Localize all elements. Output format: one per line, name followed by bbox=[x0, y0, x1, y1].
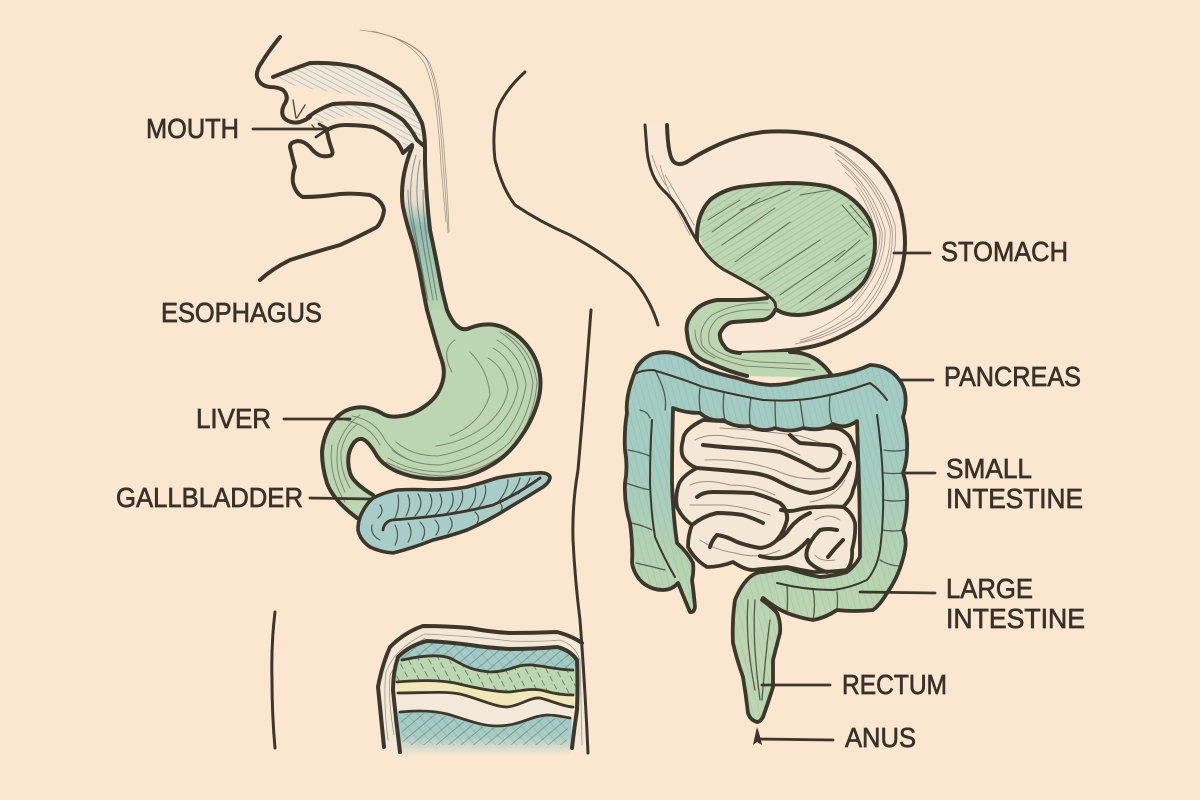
label: anus: ANUS bbox=[845, 722, 916, 753]
esophagus left wall bbox=[402, 147, 427, 310]
left stomach bbox=[322, 310, 540, 518]
lip tuft bbox=[293, 100, 316, 130]
outer arch bbox=[378, 626, 582, 747]
label: small intestine: SMALL bbox=[946, 453, 1032, 484]
cream layer bbox=[396, 692, 575, 726]
nose and upper lip outline bbox=[257, 37, 310, 123]
band lines bbox=[397, 656, 573, 726]
lumen hatching bbox=[697, 183, 875, 315]
lower lip and jaw outline bbox=[260, 132, 384, 280]
esophagus right wall bbox=[425, 147, 447, 310]
label: small intestine bbox=[946, 453, 1083, 514]
body outline: shoulder curve bbox=[494, 72, 658, 325]
palate outer arch bbox=[273, 63, 425, 147]
label: large intestine bbox=[946, 573, 1085, 634]
left pancreas bbox=[358, 473, 550, 553]
leader: mouth bbox=[253, 124, 330, 137]
soft palate band bbox=[312, 103, 417, 150]
label: rectum: RECTUM bbox=[842, 669, 947, 700]
blue upper layer bbox=[396, 641, 577, 672]
palate hatching bbox=[273, 63, 425, 147]
blue lower layer bbox=[398, 711, 572, 756]
leader lines bbox=[253, 124, 935, 740]
inner arch bbox=[393, 641, 578, 752]
outer wall outline bbox=[667, 125, 905, 353]
wall hatching bbox=[652, 146, 896, 344]
duodenum bbox=[687, 298, 833, 378]
colon texture bbox=[625, 352, 907, 722]
label: liver: LIVER bbox=[196, 403, 271, 434]
leader: small intestine bbox=[905, 472, 935, 474]
tongue arch bbox=[327, 125, 412, 153]
leader: gallbladder bbox=[310, 498, 372, 499]
esophagus tube bbox=[402, 147, 447, 316]
green layer bbox=[394, 656, 577, 696]
soft palate hatching bbox=[312, 103, 417, 150]
pancreas centre duct bbox=[383, 478, 540, 530]
colon centre lines bbox=[633, 370, 887, 590]
label: large intestine: INTESTINE bbox=[946, 603, 1085, 634]
stomach outline bbox=[322, 310, 540, 518]
leader: stomach bbox=[894, 252, 930, 254]
intestine texture bbox=[690, 428, 846, 560]
icon: anus marker bbox=[753, 727, 762, 745]
leader: pancreas bbox=[900, 379, 933, 381]
yellow layer bbox=[394, 681, 576, 707]
label: mouth: MOUTH bbox=[146, 113, 239, 144]
lumen outline bbox=[697, 183, 875, 315]
inner green lumen bbox=[697, 183, 875, 315]
haustra folds bbox=[626, 372, 906, 700]
label: pancreas: PANCREAS bbox=[944, 361, 1081, 392]
pancreas veins bbox=[372, 478, 530, 545]
upper palate bbox=[273, 63, 425, 147]
leader: rectum bbox=[762, 684, 830, 686]
label: gallbladder: GALLBLADDER bbox=[116, 482, 303, 513]
small intestine bbox=[676, 420, 858, 572]
label: esophagus: ESOPHAGUS bbox=[161, 297, 322, 328]
back of head sketch lines bbox=[360, 30, 448, 233]
large intestine bbox=[625, 352, 907, 722]
body outline: right side bbox=[573, 310, 591, 753]
lower abdomen cross-section bbox=[378, 626, 588, 756]
leader: liver bbox=[284, 418, 350, 420]
head and mouth cross-section bbox=[257, 30, 449, 280]
leader: anus bbox=[759, 739, 833, 740]
intestine folds bbox=[692, 435, 850, 572]
label: small intestine: INTESTINE bbox=[946, 483, 1083, 514]
palate inner arch bbox=[308, 103, 424, 146]
lumen dark strokes bbox=[708, 190, 870, 302]
body outline: left side bbox=[272, 612, 275, 748]
leader: large intestine bbox=[860, 592, 935, 593]
label: large intestine: LARGE bbox=[946, 573, 1033, 604]
label: stomach: STOMACH bbox=[941, 236, 1068, 267]
stomach contour lines bbox=[331, 332, 537, 502]
right stomach outer wall bbox=[645, 125, 905, 353]
